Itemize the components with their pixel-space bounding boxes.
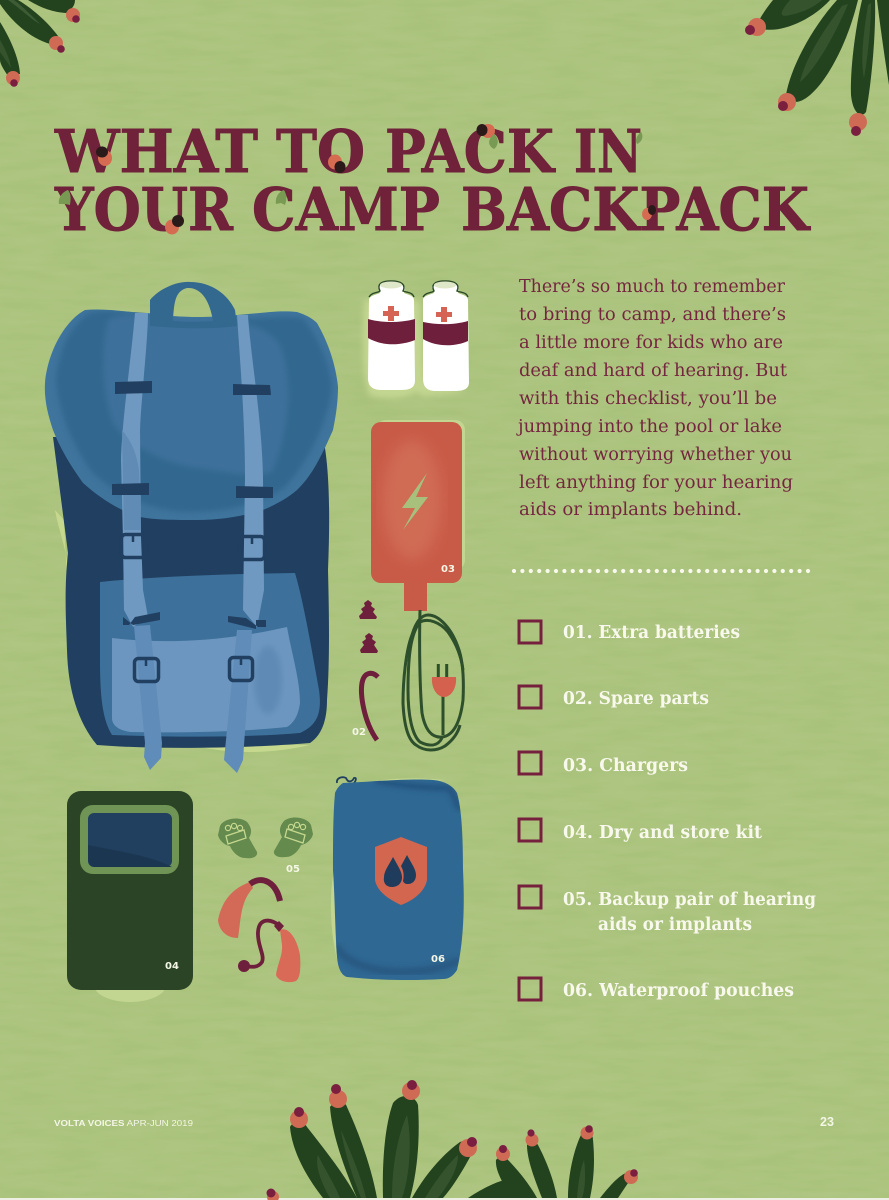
foliage: top left <box>0 0 80 87</box>
title <box>54 117 812 244</box>
item 01: 01. Extra batteries <box>563 623 740 643</box>
lower right strap <box>224 630 252 773</box>
intro paragraph: to bring to camp, and there’s <box>519 305 786 325</box>
label 04: 04 <box>165 961 179 972</box>
label 06: 06 <box>431 954 445 965</box>
intro paragraph <box>516 277 793 520</box>
backpack halo <box>55 510 310 752</box>
item 03: 03. Chargers <box>563 756 688 776</box>
right strap <box>237 315 264 627</box>
battery 2 <box>423 281 469 391</box>
title: PACK <box>385 117 556 186</box>
footer: publication line: VOLTA VOICES APR-JUN 2019 <box>54 1118 193 1128</box>
intro paragraph: deaf and hard of hearing. But <box>519 361 787 381</box>
behind-ear aid bottom <box>238 921 300 982</box>
earplug bottom <box>360 633 378 653</box>
in-ear aid left <box>218 819 257 858</box>
earplug top <box>359 600 377 619</box>
pocket <box>100 573 320 737</box>
backpack body <box>53 437 329 748</box>
illustration: backup hearing aids <box>218 818 313 982</box>
left strap <box>121 313 148 627</box>
illustration: spare parts <box>352 600 378 740</box>
label 03: 03 <box>441 564 455 575</box>
checklist <box>519 621 816 1001</box>
lower left strap <box>134 625 162 770</box>
item 02: 02. Spare parts <box>563 689 709 709</box>
title: TO <box>276 117 365 186</box>
intro paragraph: aids or implants behind. <box>519 500 742 520</box>
intro paragraph: left anything for your hearing <box>519 473 793 493</box>
illustration: backpack <box>45 282 338 773</box>
intro paragraph: without worrying whether you <box>519 445 792 465</box>
illustration: power bank charger <box>371 420 465 611</box>
item 04: 04. Dry and store kit <box>563 823 762 843</box>
icon: lightning bolt <box>402 473 428 530</box>
illustration: batteries <box>363 281 469 398</box>
item 05: aids or implants <box>598 915 752 935</box>
item 06: 06. Waterproof pouches <box>563 981 794 1001</box>
dotted divider <box>514 569 810 573</box>
intro paragraph: with this checklist, you’ll be <box>519 389 777 409</box>
foliage: bottom <box>266 1080 638 1200</box>
backpack handle <box>150 282 237 328</box>
icon: shield with drops <box>375 837 427 905</box>
title: IN <box>574 117 642 186</box>
footer: page number: 23 <box>820 1115 834 1129</box>
illustration: charging cable and plug <box>403 610 463 750</box>
tube <box>362 673 378 740</box>
item 05 <box>519 886 816 935</box>
title: CAMP <box>252 175 440 244</box>
illustration: dry and store kit <box>67 791 193 1002</box>
label 02: 02 <box>352 727 366 738</box>
backpack flap <box>45 309 338 520</box>
buckles <box>122 534 264 682</box>
title: BACKPACK <box>461 175 812 244</box>
item 02 <box>519 686 709 709</box>
intro paragraph: a little more for kids who are <box>519 333 783 353</box>
title: WHAT <box>54 117 258 186</box>
illustration: waterproof pouch <box>331 777 464 980</box>
intro paragraph: There’s so much to remember <box>519 277 786 297</box>
in-ear aid right <box>274 818 313 857</box>
title: YOUR <box>54 175 234 244</box>
label 05: 05 <box>286 864 300 875</box>
strap keepers <box>112 381 273 629</box>
battery 1 <box>368 281 415 390</box>
intro paragraph: jumping into the pool or lake <box>516 417 782 437</box>
item 04 <box>519 819 762 843</box>
foliage: top right <box>745 0 889 136</box>
behind-ear aid top <box>218 880 280 938</box>
icon: plug <box>432 664 456 697</box>
item 03 <box>519 752 688 776</box>
item 05: 05. Backup pair of hearing <box>563 890 816 910</box>
